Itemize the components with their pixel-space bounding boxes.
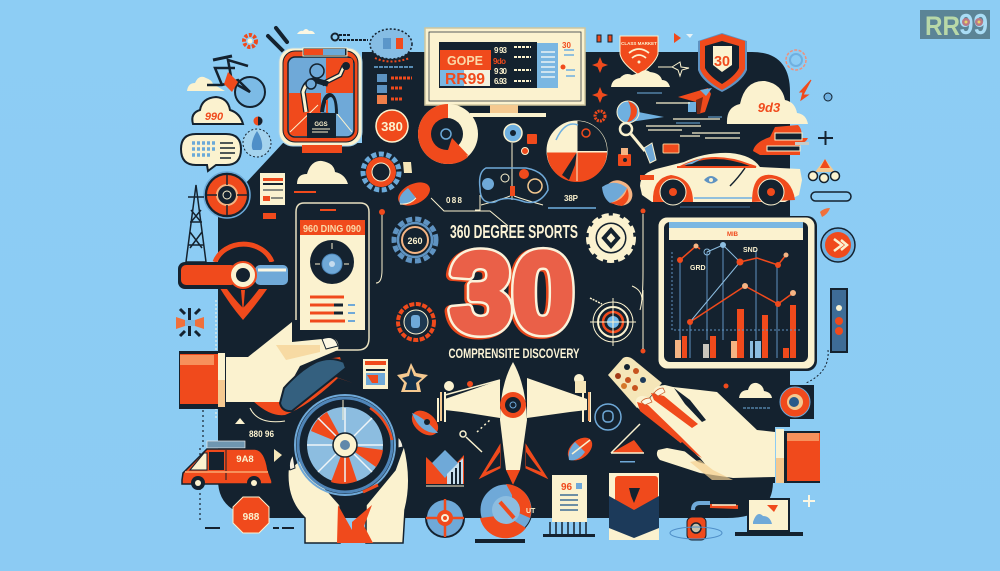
icon: wifi shield: CLASS MARKET	[621, 41, 657, 46]
icon: wifi shield	[620, 36, 658, 75]
icon: pill outline	[811, 192, 851, 201]
icon: target lens	[590, 298, 636, 346]
logo: RR99 watermark	[920, 9, 990, 41]
athlete figure: GGS	[314, 122, 328, 128]
speed lines	[646, 103, 740, 138]
chart: donut	[418, 104, 478, 164]
icon: radio tower	[186, 185, 206, 262]
panel: scoreboard monitor: 30	[562, 41, 571, 50]
icon: orange van	[182, 441, 272, 490]
big number 30: 30	[450, 230, 574, 355]
icon: envelope chart	[426, 450, 464, 486]
icon: football lower right	[563, 433, 597, 465]
panel: scoreboard monitor: 6.93	[494, 77, 508, 86]
panel: tablet chart: MIB	[727, 232, 739, 238]
icon: blue gear with orange ring	[363, 154, 399, 190]
icon: small doc chart	[363, 359, 388, 389]
icon: dashed oval with squares	[370, 29, 412, 62]
icon: nozzle gun	[678, 88, 712, 114]
icon: bottom ring	[475, 484, 536, 541]
icon: star	[397, 363, 428, 392]
dotted left guide	[215, 300, 217, 420]
bars	[675, 305, 796, 358]
blue dash lines	[637, 93, 722, 123]
icon: left orange connector	[376, 209, 385, 283]
icon: blue O circle	[595, 404, 621, 430]
icon: faucet	[670, 503, 738, 540]
line chart	[672, 242, 800, 358]
icon: dashed drop badge	[243, 129, 271, 157]
icon: report document: 96	[561, 482, 573, 493]
dash line	[294, 191, 316, 193]
title: 360 degree sports: 360 DEGREE SPORTS	[450, 222, 578, 242]
icon: small white cloud	[297, 29, 315, 34]
icon: white plus	[803, 495, 815, 507]
icon: blue gear 260	[394, 219, 436, 261]
dark dotted guide lines	[200, 410, 203, 520]
icon: small orange ring	[595, 111, 605, 121]
icon: steering ring	[204, 172, 250, 218]
logo: RR99 watermark: RR	[925, 11, 960, 41]
connector lines	[431, 195, 508, 226]
icon: play arrow	[674, 33, 681, 43]
icon: triangle	[235, 418, 245, 424]
icon: wheel between hands	[288, 395, 409, 543]
icon: arrow circle	[821, 228, 855, 262]
icon: outline sparkle	[658, 62, 689, 76]
panel: tablet chart: GRD	[690, 265, 706, 272]
icon: right hand on remote	[608, 357, 775, 480]
icon: small figure	[618, 148, 631, 166]
icon: ring gear top right	[786, 50, 806, 70]
icon: wedge triangle	[611, 424, 644, 462]
big number 30: 30	[450, 230, 574, 355]
icon: half circle dot	[254, 116, 262, 126]
icon: stop octagon	[233, 497, 269, 533]
panel: scoreboard monitor: GOPE	[447, 53, 483, 68]
icon: white chevron	[686, 34, 693, 38]
connector: right lines	[548, 207, 596, 209]
icon: crosshair target	[426, 499, 464, 537]
badge: 360 circle: 380	[381, 119, 403, 134]
logo: RR99 watermark: 99	[959, 9, 988, 41]
icon: sports car	[640, 153, 802, 205]
icon: cloud 9d3: 9d3	[758, 100, 781, 115]
panel: scoreboard monitor: RR99	[445, 71, 485, 88]
panel: scoreboard monitor	[425, 28, 585, 117]
icon: cloud under shield	[611, 70, 670, 87]
icon: target right of 3	[398, 304, 434, 340]
icon: stop octagon: 988	[243, 512, 260, 523]
panel: athlete frame	[279, 48, 362, 153]
panel: scoreboard monitor: 9do	[493, 57, 506, 66]
icon: key lower	[460, 420, 490, 452]
icon: lightning	[800, 80, 811, 100]
icon: laptop	[735, 499, 803, 536]
icon: small cloud lower right	[739, 383, 772, 398]
orange connector dot	[632, 208, 646, 354]
icon: orange bar	[263, 213, 276, 219]
icon: cream patch	[403, 162, 412, 173]
list: legend squares	[374, 67, 414, 104]
icon: big shield 30	[698, 33, 747, 92]
icon: cream gear	[588, 215, 634, 261]
icon: right cuff	[776, 429, 820, 483]
icon: magnifier fork	[620, 123, 656, 163]
icon: small blue circle	[824, 93, 832, 101]
icon: triangle dots	[808, 159, 840, 182]
arc beside controller	[250, 408, 285, 422]
icon: left hand with controller	[179, 322, 353, 415]
icon: lens and triangle	[617, 101, 664, 123]
badge: 360 circle	[376, 110, 408, 142]
panel: scoreboard monitor: 9 93	[494, 46, 508, 55]
big number 30: 30	[448, 231, 572, 356]
small dark labels	[205, 527, 294, 529]
panel: phone	[296, 203, 369, 350]
icon: speech bubble	[181, 134, 241, 171]
label: small connector	[590, 298, 602, 304]
dash under car	[680, 206, 750, 208]
icon: dark plus	[818, 131, 833, 145]
panel: tablet chart	[657, 216, 817, 371]
icon: football left	[394, 178, 434, 210]
icon: document	[260, 173, 285, 205]
label: 38P: 38P	[564, 194, 579, 203]
icon: small drone	[176, 308, 204, 336]
icon: two small bars	[597, 35, 612, 42]
icon: play triangle cream	[274, 449, 282, 462]
icon: bicycle on cloud	[187, 56, 265, 107]
icon: valve pipe	[178, 244, 290, 320]
small orange plus	[724, 384, 728, 388]
label: 360 96: 880 96	[249, 429, 274, 439]
icon: orange car top	[753, 125, 809, 155]
icon: orange van: 9A8	[236, 454, 254, 465]
icon: orange drop	[820, 208, 830, 217]
subtitle: comprensite discovery: COMPRENSITE DISCOVERY	[448, 345, 580, 361]
icon: football right	[601, 175, 637, 211]
dash line under cloud	[743, 407, 770, 409]
icon: bottom ring: UT	[526, 508, 536, 515]
dark central panel	[218, 52, 790, 518]
panel: phone: 960 DING 090	[303, 224, 361, 235]
icon: orange pill	[663, 144, 679, 153]
icon: big shield 30: 30	[714, 53, 730, 70]
icon: blue gear 260: 260	[407, 236, 423, 246]
icon: orange stars	[592, 57, 608, 103]
icon: vertical device	[830, 288, 848, 353]
icon: cloud with 990: 990	[205, 111, 224, 123]
icon: airplane	[438, 362, 590, 485]
dashed line right	[806, 350, 828, 383]
icon: round center controller	[480, 124, 548, 205]
chart: quadrant pie	[547, 121, 607, 182]
chart label: 088: 088	[446, 196, 463, 205]
icon: cloud 9d3	[727, 81, 808, 124]
icon: square orange dial	[778, 385, 814, 419]
panel: scoreboard monitor: 9 30	[494, 67, 508, 76]
icon: cloud with 990	[192, 97, 243, 124]
icon: small orange gear	[244, 35, 256, 47]
panel: tablet chart: SND	[743, 247, 758, 254]
icon: folder pack	[609, 473, 659, 540]
icon: report document	[543, 475, 595, 537]
icon: key	[332, 34, 368, 40]
icon: cream cloud	[297, 161, 348, 184]
icon: wrench	[268, 28, 287, 53]
icon: football lower left	[407, 406, 443, 440]
